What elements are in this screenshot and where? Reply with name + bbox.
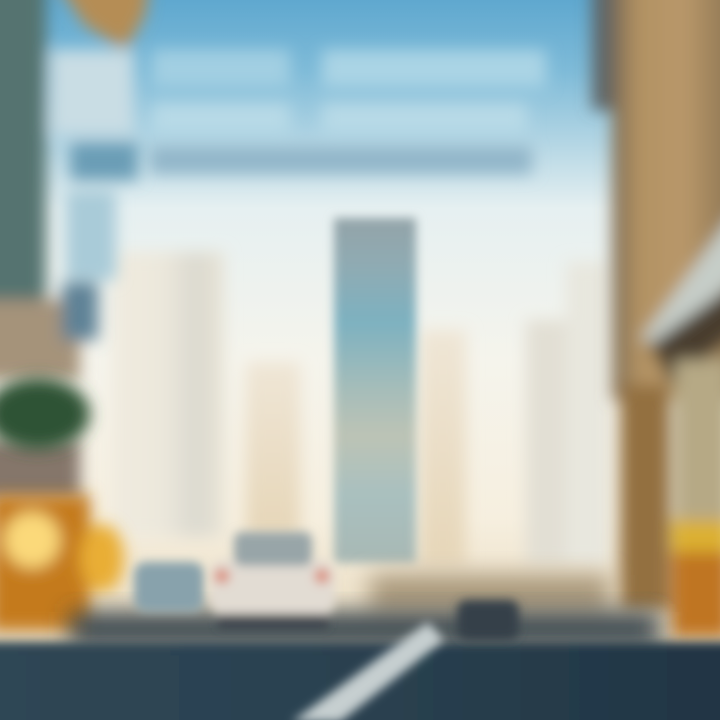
green tree	[0, 378, 90, 450]
blurred subtitle bar	[150, 146, 532, 174]
left cream tower	[112, 252, 224, 537]
blue car	[134, 562, 204, 612]
left foreground building	[0, 0, 150, 500]
road	[0, 612, 720, 720]
glowing orange shop lights	[0, 495, 124, 630]
dark traffic band	[70, 612, 660, 646]
tan tower right of center	[420, 330, 466, 565]
white car	[210, 532, 335, 628]
small tan tower	[246, 362, 300, 537]
road lane marking	[292, 622, 444, 720]
distant dark car	[457, 600, 519, 640]
distant towers	[112, 252, 610, 565]
central glass tower	[334, 218, 416, 563]
right foreground building	[592, 0, 720, 637]
distant street traffic band	[370, 575, 610, 615]
right cream towers	[526, 320, 566, 565]
blurred headline text blocks	[150, 50, 546, 174]
